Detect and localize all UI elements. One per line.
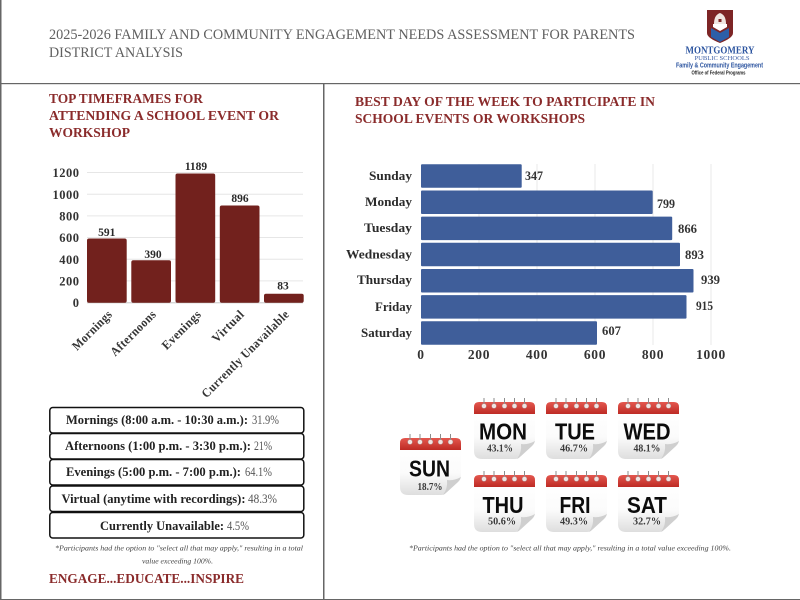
heading: top timeframes: [49, 92, 280, 141]
box: evenings: [50, 460, 304, 485]
logo: Montgomery Public Schools: MONTGOMERY: [686, 46, 755, 56]
bar chart: best day of the week: Saturday: [361, 326, 413, 340]
footnote: left: value exceeding 100%.: [142, 556, 213, 566]
icon: calendar Friday: 49.3%: [560, 516, 588, 528]
logo: Montgomery Public Schools: [676, 10, 764, 76]
icon: calendar Tuesday: 46.7%: [560, 442, 588, 454]
icon: calendar Wednesday: 48.1%: [634, 442, 660, 454]
icon: school shield: [707, 10, 733, 43]
bar chart: best day of the week: 200: [468, 347, 490, 362]
bar chart: best day of the week: 400: [526, 347, 548, 362]
icon: calendar Sunday: SUN: [409, 456, 450, 482]
tagline: ENGAGE...EDUCATE...INSPIRE: [49, 572, 244, 587]
bar chart: best day of the week: Monday: [365, 195, 413, 209]
icon: calendar Sunday: 18.7%: [418, 481, 442, 493]
icon: calendar Monday: 43.1%: [487, 442, 513, 454]
bar chart: best day of the week: 939: [701, 273, 720, 287]
bar chart: best day of the week: 347: [525, 169, 543, 183]
percentage boxes: [50, 408, 304, 538]
box: virtual: 48.3%: [248, 492, 277, 506]
box: currently unavailable: Currently Unavailable:: [100, 518, 224, 533]
logo: Montgomery Public Schools: Office of Federal Programs: [692, 70, 746, 76]
logo: Montgomery Public Schools: PUBLIC SCHOOLS: [694, 56, 750, 62]
icon: calendar Tuesday: [546, 398, 607, 459]
icon: calendar Friday: [546, 471, 607, 532]
icon: calendar Friday: FRI: [560, 492, 590, 518]
box: mornings: Mornings (8:00 a.m. - 10:30 a.m.):: [66, 412, 248, 427]
title: DISTRICT ANALYSIS: [49, 45, 183, 61]
footnote: left: [55, 544, 303, 566]
bar chart: best day of the week: Wednesday: [346, 248, 413, 262]
bar chart: timeframes: 1200: [52, 166, 80, 180]
bar chart: timeframes: Mornings: [69, 307, 115, 353]
bar chart: best day of the week: Sunday: [369, 169, 413, 183]
bar chart: best day of the week: [346, 164, 726, 362]
icon: calendar Wednesday: [618, 398, 679, 459]
heading: top timeframes: WORKSHOP: [49, 126, 130, 141]
bar chart: best day of the week: 915: [696, 299, 713, 313]
heading: best day of the week: [355, 95, 655, 127]
bar chart: timeframes: [52, 161, 304, 401]
bar chart: timeframes: 1189: [185, 161, 207, 173]
bar chart: timeframes: Afternoons: [108, 307, 159, 359]
bar chart: timeframes: 390: [144, 249, 162, 261]
icon: calendar Sunday: [400, 434, 461, 495]
title: 2025-2026 FAMILY AND COMMUNITY ENGAGEMENT NEEDS ASSESSMENT FOR PARENTS: [49, 27, 635, 43]
bar chart: best day of the week: 893: [685, 248, 704, 262]
bar chart: best day of the week: Thursday: [357, 273, 413, 287]
box: evenings: Evenings (5:00 p.m. - 7:00 p.m.):: [66, 464, 241, 479]
bar chart: timeframes: 896: [231, 193, 249, 205]
bar chart: best day of the week: 866: [678, 222, 697, 236]
bar chart: best day of the week: 600: [584, 347, 606, 362]
icon: calendar Saturday: SAT: [627, 492, 667, 518]
box: virtual: [50, 486, 304, 512]
bar chart: timeframes: 400: [59, 253, 80, 267]
bar chart: timeframes: Evenings: [159, 307, 204, 352]
footnote: left: *Participants had the option to "select all that may apply," resulting in a total: [55, 544, 303, 552]
icon: calendar Thursday: 50.6%: [488, 516, 516, 528]
box: mornings: [50, 408, 304, 433]
box: evenings: 64.1%: [245, 465, 272, 479]
bar chart: best day of the week: 799: [657, 197, 675, 211]
icon: calendar Monday: [474, 398, 535, 459]
bar chart: best day of the week: Tuesday: [364, 221, 413, 235]
bar chart: timeframes: 0: [73, 296, 80, 310]
bar chart: timeframes: Currently Unavailable: [199, 307, 292, 401]
bar chart: timeframes: 1000: [52, 188, 80, 202]
bar chart: timeframes: 591: [98, 227, 116, 239]
title: [49, 27, 635, 61]
icon: calendar Thursday: [474, 471, 535, 532]
heading: best day of the week: BEST DAY OF THE WEEK TO PARTICIPATE IN: [355, 95, 655, 110]
box: virtual: Virtual (anytime with recordings):: [62, 491, 246, 506]
logo: Montgomery Public Schools: Family & Community Engagement: [676, 62, 764, 70]
icon: calendar Saturday: [618, 471, 679, 532]
box: currently unavailable: [50, 512, 304, 538]
bar chart: best day of the week: 607: [602, 324, 621, 338]
bar chart: best day of the week: Friday: [375, 300, 413, 314]
icon: calendar Tuesday: TUE: [555, 418, 595, 444]
icon: calendar Saturday: 32.7%: [633, 516, 661, 528]
bar chart: timeframes: 83: [277, 280, 289, 292]
bar chart: timeframes: 800: [59, 210, 80, 224]
box: currently unavailable: 4.5%: [227, 519, 249, 533]
icon: calendar Thursday: THU: [482, 492, 524, 518]
heading: top timeframes: TOP TIMEFRAMES FOR: [49, 92, 204, 107]
icon: calendar Wednesday: WED: [624, 418, 670, 444]
bar chart: timeframes: 600: [59, 231, 80, 245]
bar chart: best day of the week: 1000: [696, 347, 726, 362]
box: afternoons: [50, 434, 304, 459]
bar chart: best day of the week: 0: [417, 347, 425, 362]
bar chart: timeframes: Virtual: [209, 307, 247, 345]
icon: calendar Monday: MON: [479, 418, 527, 444]
heading: best day of the week: SCHOOL EVENTS OR WORKSHOPS: [355, 112, 585, 127]
bar chart: timeframes: 200: [59, 274, 80, 288]
box: afternoons: 21%: [254, 439, 272, 453]
box: mornings: 31.9%: [252, 413, 279, 427]
box: afternoons: Afternoons (1:00 p.m. - 3:30 p.m.):: [65, 438, 251, 453]
bar chart: best day of the week: 800: [642, 347, 664, 362]
heading: top timeframes: ATTENDING A SCHOOL EVENT OR: [49, 109, 280, 124]
footnote: right: *Participants had the option to "select all that may apply," resulting in a total value exceeding 100%.: [409, 544, 731, 552]
